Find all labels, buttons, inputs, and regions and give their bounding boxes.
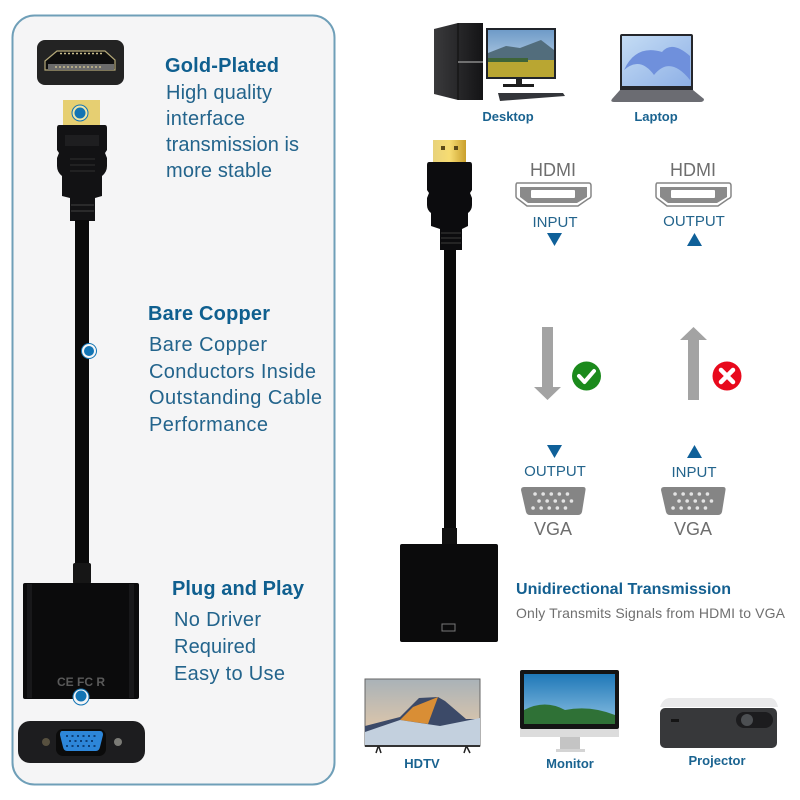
- label: OUTPUT: [524, 463, 586, 480]
- text block: unidirectional transmission: [516, 581, 786, 621]
- label: Desktop: [482, 109, 534, 124]
- text block: bare copper: [148, 303, 322, 436]
- text block: gold-plated: more stable: [166, 160, 272, 182]
- icon: HDMI output: HDMI: [670, 160, 716, 180]
- certification marks: CE FC R: [57, 675, 105, 689]
- label: INPUT: [672, 464, 716, 481]
- icon: VGA output: [521, 445, 586, 539]
- VGA port glyph: [442, 624, 455, 631]
- label: Monitor: [546, 756, 594, 771]
- icon: cross: [712, 362, 742, 390]
- label: INPUT: [532, 214, 578, 231]
- marker: gold contacts: [72, 105, 88, 121]
- cable: HDMI to VGA with connectors: [23, 100, 139, 699]
- icon: desktop: [434, 23, 565, 124]
- arrow: up blocked: [680, 327, 707, 400]
- text block: unidirectional transmission: Only Transmits Signals from HDMI to VGA: [516, 605, 786, 621]
- icon: laptop: [611, 34, 704, 124]
- text block: gold-plated: interface: [166, 108, 245, 130]
- text block: plug and play: Easy to Use: [174, 663, 285, 685]
- label: HDTV: [404, 756, 440, 771]
- arrow: down allowed: [534, 327, 561, 400]
- text block: gold-plated: High quality: [166, 82, 272, 104]
- marker: copper cable: [82, 344, 96, 358]
- text block: gold-plated: [165, 55, 299, 182]
- label: OUTPUT: [663, 213, 725, 230]
- text block: bare copper: Outstanding Cable: [149, 387, 322, 409]
- icon: HDTV: [365, 679, 480, 771]
- marker: adapter box: [73, 689, 89, 705]
- label: Projector: [688, 753, 746, 768]
- text block: unidirectional transmission: Unidirectional Transmission: [516, 581, 731, 598]
- text block: plug and play: [172, 578, 305, 685]
- text block: plug and play: Plug and Play: [172, 578, 305, 600]
- text block: bare copper: Performance: [149, 414, 268, 436]
- adapter cable: right: [400, 140, 498, 642]
- text block: bare copper: Bare Copper: [149, 334, 267, 356]
- panel: features: [12, 16, 334, 784]
- arrow: [547, 233, 562, 246]
- icon: VGA output: VGA: [534, 519, 572, 539]
- icon: HDMI port close-up: [37, 40, 124, 85]
- label: Laptop: [634, 109, 678, 124]
- icon: HDMI input: HDMI: [530, 160, 576, 180]
- text block: plug and play: Required: [174, 636, 256, 658]
- icon: VGA port close-up: [18, 721, 145, 763]
- text block: bare copper: Conductors Inside: [149, 361, 316, 383]
- icon: monitor: [520, 670, 619, 771]
- text block: bare copper: Bare Copper: [148, 303, 270, 325]
- icon: HDMI output: [656, 160, 731, 246]
- text block: gold-plated: transmission is: [166, 134, 299, 156]
- arrow: [687, 233, 702, 246]
- icon: projector: [660, 698, 778, 768]
- icon: check: [572, 362, 601, 390]
- icon: VGA input: [661, 445, 726, 539]
- text block: plug and play: No Driver: [174, 609, 261, 631]
- text block: gold-plated: Gold-Plated: [165, 55, 279, 77]
- icon: VGA input: VGA: [674, 519, 712, 539]
- icon: HDMI input: [516, 160, 591, 246]
